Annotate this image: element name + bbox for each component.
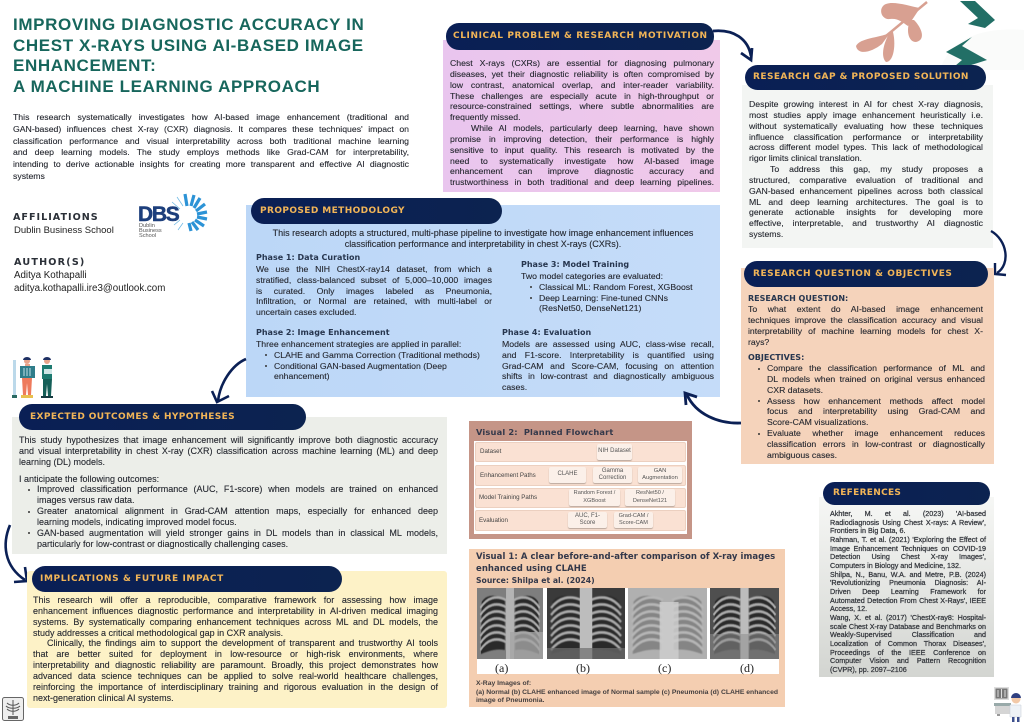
heading: clinical problem xyxy=(446,23,714,50)
text: research gap: ML and deep learning architectures. The goal is to xyxy=(749,197,983,207)
text: objectives: DL models when trained on original versus enhanced xyxy=(767,374,985,384)
text: references: Frontiers in Big Data, 6. xyxy=(830,526,906,535)
text: references: Detection Using Chest X-ray Images', xyxy=(830,552,986,561)
x-ray a xyxy=(477,588,543,659)
text: references: Image Enhancement Techniques on COVID-19 xyxy=(830,544,986,553)
text: references: 'Revolutionizing Pneumonia Diagnosis: AI- xyxy=(830,578,986,587)
text: objectives xyxy=(748,353,985,460)
text: references: Access, 12. xyxy=(830,604,867,613)
panel: visual 2 flowchart xyxy=(469,421,692,539)
text: references: Shilpa, N., Banu, W.A. and Metre, P.B. (2024) xyxy=(830,570,986,579)
flow node: NIH: NIH Dataset xyxy=(598,448,631,454)
text: clinical problem: frequently missed. xyxy=(450,112,520,122)
text: references: scale Chest X-ray Database and Benchmarks on xyxy=(830,622,986,631)
text: objectives: ambiguous cases. xyxy=(767,450,837,460)
text: clinical problem: trustworthiness in both traditional and deep learning pipelines. xyxy=(450,177,714,187)
panel: expected outcomes xyxy=(12,404,447,554)
flow node: gamma xyxy=(593,467,632,483)
heading: research question xyxy=(744,261,988,287)
phase 1: We use the NIH ChestX-ray14 dataset, from which a xyxy=(256,264,492,274)
text: references xyxy=(830,509,986,674)
affiliations: Dublin Business School xyxy=(14,225,114,236)
heading: research gap xyxy=(745,65,986,90)
panel: methodology xyxy=(246,198,720,397)
text: outcomes: GAN-based augmentation will yield stronger gains in DL models than in classical ML models, xyxy=(37,528,438,538)
flow node: GAN: GAN xyxy=(654,468,666,474)
text: outcomes: images versus raw data. xyxy=(37,495,135,505)
text: objectives: OBJECTIVES: xyxy=(748,353,804,362)
text: research gap: Despite growing interest in AI for chest X-ray diagnosis, xyxy=(749,99,983,109)
flow row: dataset xyxy=(475,442,686,462)
text: objectives: Score-CAM visualizations. xyxy=(767,417,868,427)
text: references: Driven Deep Learning Framework for xyxy=(830,587,986,596)
x-ray b xyxy=(547,588,625,659)
heading: methodology xyxy=(251,198,502,224)
phase 4: Phase 4: Evaluation xyxy=(502,328,591,337)
text: research question: techniques improve the classification accuracy and visual xyxy=(748,315,983,325)
text: objectives: Evaluate whether image enhancement reduces xyxy=(767,428,985,438)
text: outcomes: I anticipate the following outcomes: xyxy=(19,474,159,484)
phase 2: enhancement) xyxy=(274,371,330,381)
heading: methodology: PROPOSED METHODOLOGY xyxy=(260,206,405,216)
text: research question: To what extent do AI-based image enhancement xyxy=(748,304,983,314)
flow row: enhancement: Enhancement Paths xyxy=(480,472,536,479)
visual 1 caption text: image of Pneumonia. xyxy=(476,697,544,704)
visual 1 caption text xyxy=(476,680,778,704)
arrow: outcomes to implications xyxy=(4,524,28,584)
visual 1 caption text: X-Ray Images of: xyxy=(476,680,531,687)
flow node: CLAHE xyxy=(549,467,586,483)
text: implications: Clinically, the findings aim to support the development of transparent and trustworthy AI tools xyxy=(47,638,438,648)
title: ENHANCEMENT: xyxy=(13,56,156,75)
text: clinical problem: sensitive to input quality. This research is motivated by the xyxy=(450,145,714,155)
flow node: NIH xyxy=(597,444,632,460)
text: references: Weakly-Supervised Classification and xyxy=(830,630,986,639)
abstract text: and deep learning models. The study employs methods like Grad-CAM for interpretability, xyxy=(13,147,409,157)
panel: research question xyxy=(741,261,994,464)
text: references: Computers in Biology and Medicine, 132. xyxy=(830,561,961,570)
phase 3 xyxy=(521,260,693,313)
text: methodology intro xyxy=(272,228,694,249)
text: outcomes xyxy=(19,435,438,549)
text: research gap: influence classification performance or interpretability xyxy=(749,132,983,142)
flow row: training xyxy=(475,488,686,508)
icon: x-ray tile xyxy=(2,697,24,721)
decoration: leaves and chevrons xyxy=(856,1,995,65)
text: outcomes: This study hypothesizes that image enhancement will significantly improve both diagnostic accuracy xyxy=(19,435,438,445)
flow node: resnet xyxy=(625,489,675,506)
flow node: gamma: Correction xyxy=(599,475,626,481)
text: research gap: generate actionable insights for developing more xyxy=(749,207,983,217)
abstract text: intending to derive actionable insights for creating more transparent and effective AI diagnostic xyxy=(13,159,409,169)
heading: visual 1: enhanced using CLAHE xyxy=(476,564,587,574)
panel: clinical problem xyxy=(443,23,720,192)
text: research gap: structured, comparative evaluation of traditional and xyxy=(749,175,983,185)
flow node: resnet: ResNet50 / xyxy=(636,490,664,496)
text: methodology intro: This research adopts a structured, multi-phase pipeline to investigate how image enhancement influences xyxy=(273,228,693,238)
flowchart inner area xyxy=(474,441,687,534)
flow node: CLAHE: CLAHE xyxy=(557,471,578,477)
text: outcomes: learning models, indicating improved model focus. xyxy=(37,517,237,527)
flow node: AUC: Score xyxy=(580,520,595,526)
arrow: question to methodology xyxy=(683,391,741,424)
text: implications: study addresses a critical methodological gap in CXR analysis. xyxy=(33,628,283,638)
phase 1: stratified, class-balanced subset of 5,000–10,000 images xyxy=(256,275,492,285)
title xyxy=(13,15,364,96)
arrow: clinical to gap xyxy=(712,29,754,62)
arrow: methodology to outcomes xyxy=(210,358,246,404)
heading: outcomes: EXPECTED OUTCOMES & HYPOTHESES xyxy=(30,412,235,422)
phase 4: shifts in low-contrast and diagnostically ambiguous xyxy=(502,371,714,381)
heading: visual 2: Visual 2: Planned Flowchart xyxy=(476,427,614,437)
abstract text: This research systematically investigates how AI-based image enhancement (traditional and xyxy=(13,112,409,122)
logo: Dublin Business School xyxy=(138,194,208,239)
abstract text: systems xyxy=(13,171,45,181)
title: A MACHINE LEARNING APPROACH xyxy=(13,77,320,96)
phase 3: Deep Learning: Fine-tuned CNNs xyxy=(539,293,668,303)
caption: (b): (b) xyxy=(576,661,590,675)
text: references: Proceedings of the IEEE Conference on xyxy=(830,648,986,656)
phase 2: CLAHE and Gamma Correction (Traditional methods) xyxy=(274,350,480,360)
flow row: dataset: Dataset xyxy=(480,448,501,455)
phase 4: Grad-CAM and Score-CAM, focusing on attention xyxy=(502,361,714,371)
text: research gap xyxy=(748,99,983,239)
text: implications: interpretability and diagnostic reliability are paramount. Broadly, this project demonstrates how xyxy=(33,660,438,670)
text: research gap: GAN-based enhancement pipelines across both classical xyxy=(749,186,983,196)
x-ray c xyxy=(628,588,707,659)
text: references: Localization of Common Thorax Diseases', xyxy=(830,639,986,648)
flow node: GAN: Augmentation xyxy=(642,475,678,481)
heading: references xyxy=(823,482,990,505)
panel: references xyxy=(819,482,994,677)
phase 1: Infiltration, or Normal are retained, with multi-label or xyxy=(256,296,492,306)
phase 4: Models are assessed using AUC, class-wise recall, xyxy=(502,339,714,349)
visual 1 caption text: (a) Normal (b) CLAHE enhanced image of Normal sample (c) Pneumonia (d) CLAHE enhanced xyxy=(476,689,778,696)
phase 1 xyxy=(256,253,492,317)
text: research gap: effective, interpretable, and trustworthy AI diagnostic xyxy=(749,218,983,228)
phase 1: is curated. Only images labeled as Pneumonia, xyxy=(256,286,492,296)
text: objectives: Assess how enhancement methods affect model xyxy=(767,396,985,406)
text: research question: interpretability of machine learning models for chest X- xyxy=(748,326,983,336)
heading: research question: RESEARCH QUESTION & OBJECTIVES xyxy=(753,269,952,279)
caption: (a): (a) xyxy=(495,661,508,675)
text: research gap: without systematically evaluating how these techniques xyxy=(749,121,983,131)
affiliations xyxy=(13,212,114,236)
affiliations: AFFILIATIONS xyxy=(13,212,99,223)
text: implications: next-generation clinical AI systems. xyxy=(33,693,174,703)
x-ray d xyxy=(710,588,779,659)
logo: Dublin Business School: Dublin xyxy=(139,223,155,229)
panel: visual 1 x-rays xyxy=(469,549,785,707)
text: objectives: focus and interpretability using Grad-CAM and xyxy=(767,406,985,416)
abstract text: classification performance and visual interpretability across both traditional machine learning xyxy=(13,136,409,146)
logo: Dublin Business School: DBS xyxy=(138,203,180,226)
heading: clinical problem: CLINICAL PROBLEM & RESEARCH MOTIVATION xyxy=(453,31,708,41)
flow node: grad-cam: Grad-CAM / xyxy=(619,513,648,519)
authors: aditya.kothapalli.ire3@outlook.com xyxy=(14,283,165,294)
icon: clinicians with x-ray xyxy=(12,357,53,398)
icon: doctor with x-ray xyxy=(994,687,1022,722)
phase 2: Three enhancement strategies are applied in parallel: xyxy=(256,339,461,349)
phase 3: Phase 3: Model Training xyxy=(521,260,629,269)
phase 2: Phase 2: Image Enhancement xyxy=(256,328,390,337)
text: outcomes: Greater anatomical alignment in Grad-CAM attention maps, especially for enhanced deep xyxy=(37,506,438,516)
authors: Aditya Kothapalli xyxy=(14,270,87,281)
text: implications: reinforcing the importance of interdisciplinary training and rigorous evaluation in the design of xyxy=(33,682,438,692)
text: research gap: across different model types. This lack of methodological xyxy=(749,142,983,152)
flow node: random forest: XGBoost xyxy=(583,498,606,504)
phase 1: uncertain cases excluded. xyxy=(256,307,356,317)
text: references: Computer Vision and Pattern Recognition xyxy=(830,656,986,665)
text: references: (CVPR), pp. 2097–2106 xyxy=(830,665,907,674)
heading: visual 1: Visual 1: A clear before-and-after comparison of X-ray images xyxy=(476,552,775,562)
phase 3: (ResNet50, DenseNet121) xyxy=(539,303,641,313)
text: references: Automated Detection From Chest X-Rays', IEEE xyxy=(830,596,986,605)
text: outcomes: Improved classification performance (AUC, F1-score) when models are trained on enhanced xyxy=(37,484,438,494)
text: clinical problem: While AI models, particularly deep learning, have shown xyxy=(471,123,714,133)
text: implications: enhancement influences diagnostic performance and interpretability in AI-driven medical imaging xyxy=(33,606,438,616)
phase 2 xyxy=(256,328,480,381)
text: research gap: systems. xyxy=(749,229,783,239)
text: clinical problem: resource-constrained settings, where subtle abnormalities are xyxy=(450,101,714,111)
text: implications: This research will offer a reproducible, comparative framework for assessing how image xyxy=(33,595,438,605)
arrow: gap to question xyxy=(990,230,1007,276)
phase 4 xyxy=(502,328,714,392)
text: clinical problem: These challenges are especially acute in high-throughput or xyxy=(450,91,714,101)
text: implications: advanced data science techniques can be applied to solve real-world healthcare challenges, xyxy=(33,671,438,681)
flow node: GAN xyxy=(638,467,682,483)
flow row: evaluation: Evaluation xyxy=(479,517,508,524)
text: research question: rays? xyxy=(748,337,769,347)
caption: (d): (d) xyxy=(740,661,754,675)
abstract text: GAN-based) influences chest X-ray (CXR) diagnosis. It compares these techniques' impact on xyxy=(13,124,409,134)
flow row: evaluation xyxy=(475,510,686,531)
text: outcomes: learning (DL) models. xyxy=(19,457,105,467)
text: implications: that are better suited for deployment in low-resource or high-risk environments, where xyxy=(33,649,438,659)
heading: visual 1 xyxy=(476,552,775,585)
caption: (c): (c) xyxy=(658,661,671,675)
text: research gap: rigor limits clinical translation. xyxy=(749,153,862,163)
flow node: random forest xyxy=(569,489,620,506)
text: clinical problem: Chest X-rays (CXRs) are essential for diagnosing pulmonary xyxy=(450,58,714,68)
heading: visual 1: Source: Shilpa et al. (2024) xyxy=(476,576,595,585)
flow node: AUC xyxy=(568,512,607,528)
text: references: Radiodiagnosis Using Chest X-rays: A Review', xyxy=(830,518,986,527)
heading: implications xyxy=(32,566,342,592)
text: references: Akhter, M. et al. (2023) 'AI-based xyxy=(830,509,986,518)
heading: implications: IMPLICATIONS & FUTURE IMPACT xyxy=(40,574,224,584)
phase 4: and F1-score. Interpretability is quantified using xyxy=(502,350,714,360)
text: clinical problem: promise in improving detection, their performance is highly xyxy=(450,134,714,144)
text: outcomes: particularly for low-contrast or diagnostically challenging cases. xyxy=(37,539,288,549)
authors xyxy=(14,257,165,294)
authors: AUTHOR(S) xyxy=(14,257,86,268)
text: implications xyxy=(33,595,438,703)
text: methodology intro: classification performance and interpretability in chest X-rays (CXRs). xyxy=(345,239,621,249)
flow node: grad-cam xyxy=(614,512,653,528)
text: research question xyxy=(748,294,984,347)
logo: Dublin Business School: School xyxy=(139,233,156,239)
text: clinical problem: diseases, yet their diagnostic reliability is often compromised by xyxy=(450,69,714,79)
text: references: Wang, X. et al. (2017) 'ChestX-ray8: Hospital- xyxy=(830,613,986,622)
phase 3: Classical ML: Random Forest, XGBoost xyxy=(539,282,693,292)
heading: references: REFERENCES xyxy=(833,488,901,498)
title: IMPROVING DIAGNOSTIC ACCURACY IN xyxy=(13,15,364,34)
panel: implications xyxy=(27,566,447,708)
text: references: Rahman, T. et al. (2021) 'Exploring the Effect of xyxy=(830,535,986,544)
text: research question: RESEARCH QUESTION: xyxy=(748,294,848,303)
text: outcomes: and visual interpretability in chest X-ray (CXR) classification across machine learning (ML) and deep xyxy=(19,446,438,456)
logo: Dublin Business School: Business xyxy=(139,228,162,234)
heading: outcomes xyxy=(19,404,306,430)
flow row: enhancement xyxy=(475,465,686,486)
text: research gap: To address this gap, my study proposes a xyxy=(770,164,983,174)
flow node: gamma: Gamma xyxy=(602,468,623,474)
text: clinical problem xyxy=(450,58,714,187)
title: CHEST X-RAYS USING AI-BASED IMAGE xyxy=(13,36,364,55)
text: clinical problem: need to systematically investigate how AI-based image xyxy=(450,156,714,166)
abstract text xyxy=(13,112,409,181)
heading: research gap: RESEARCH GAP & PROPOSED SOLUTION xyxy=(753,72,969,82)
flow row: training: Model Training Paths xyxy=(479,494,537,501)
phase 1: Phase 1: Data Curation xyxy=(256,253,360,262)
text: objectives: classification errors in low-contrast or diagnostically xyxy=(767,439,985,449)
flow node: resnet: DenseNet121 xyxy=(633,498,667,504)
x-ray images strip xyxy=(477,588,779,674)
phase 3: Two model categories are evaluated: xyxy=(521,271,663,281)
phase 4: cases. xyxy=(502,382,527,392)
flow node: AUC: AUC, F1- xyxy=(575,513,600,519)
text: objectives: CXR datasets. xyxy=(767,385,823,395)
text: objectives: Compare the classification performance of ML and xyxy=(767,363,985,373)
panel: research gap xyxy=(742,65,993,248)
text: research gap: most studies apply image enhancement heuristically i.e. xyxy=(749,110,983,120)
phase 2: Conditional GAN-based Augmentation (Deep xyxy=(274,361,447,371)
text: implications: systems. By systematically comparing enhancement techniques across ML and DL models, the xyxy=(33,617,438,627)
flow node: random forest: Random Forest / xyxy=(574,490,615,496)
text: clinical problem: enhancement can improve diagnostic accuracy and xyxy=(450,166,714,176)
text: clinical problem: low contrast, anatomical overlap, and inter-reader variability. xyxy=(450,80,714,90)
flow node: grad-cam: Score-CAM xyxy=(619,520,648,526)
